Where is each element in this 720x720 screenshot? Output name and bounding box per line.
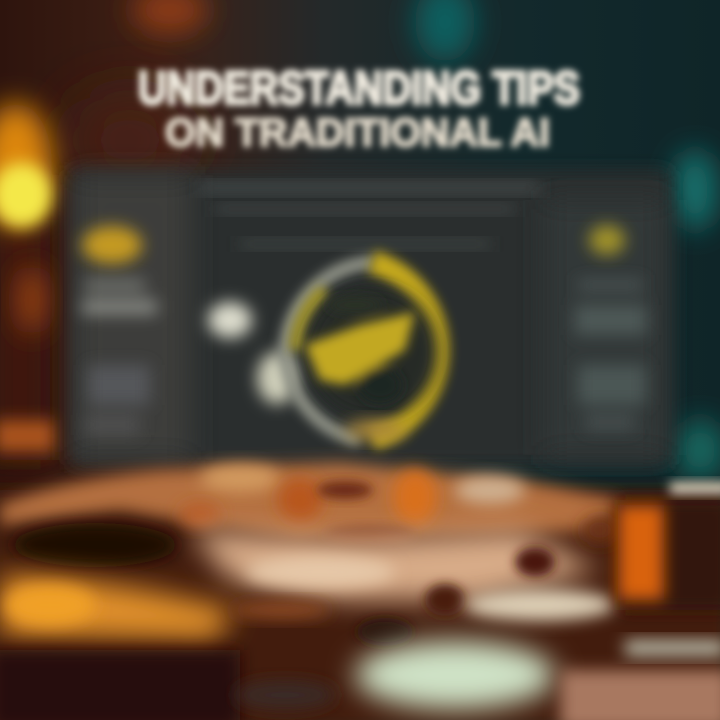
ring interior [306,286,438,418]
right column [575,225,647,430]
gold glyph centre [305,297,415,403]
ring bottom orange [345,420,405,440]
title [138,61,580,155]
magnifier ring chart [208,262,438,440]
white pointer blob [208,302,252,338]
icon: left gold badge [82,226,142,264]
title: ON TRADITIONAL AI [165,111,550,155]
foreground table [0,462,720,720]
ring gold arc [372,262,437,438]
cup at lower right [618,482,720,656]
title: UNDERSTANDING TIPS [138,61,580,114]
left column text [82,280,157,435]
dark tray at left [13,523,177,567]
left column [82,226,157,435]
right column text [575,280,647,430]
icon: right gold badge [589,225,625,255]
ring grey arc [285,262,375,440]
lamp glow at left [0,103,55,460]
central dark panel [70,170,670,465]
